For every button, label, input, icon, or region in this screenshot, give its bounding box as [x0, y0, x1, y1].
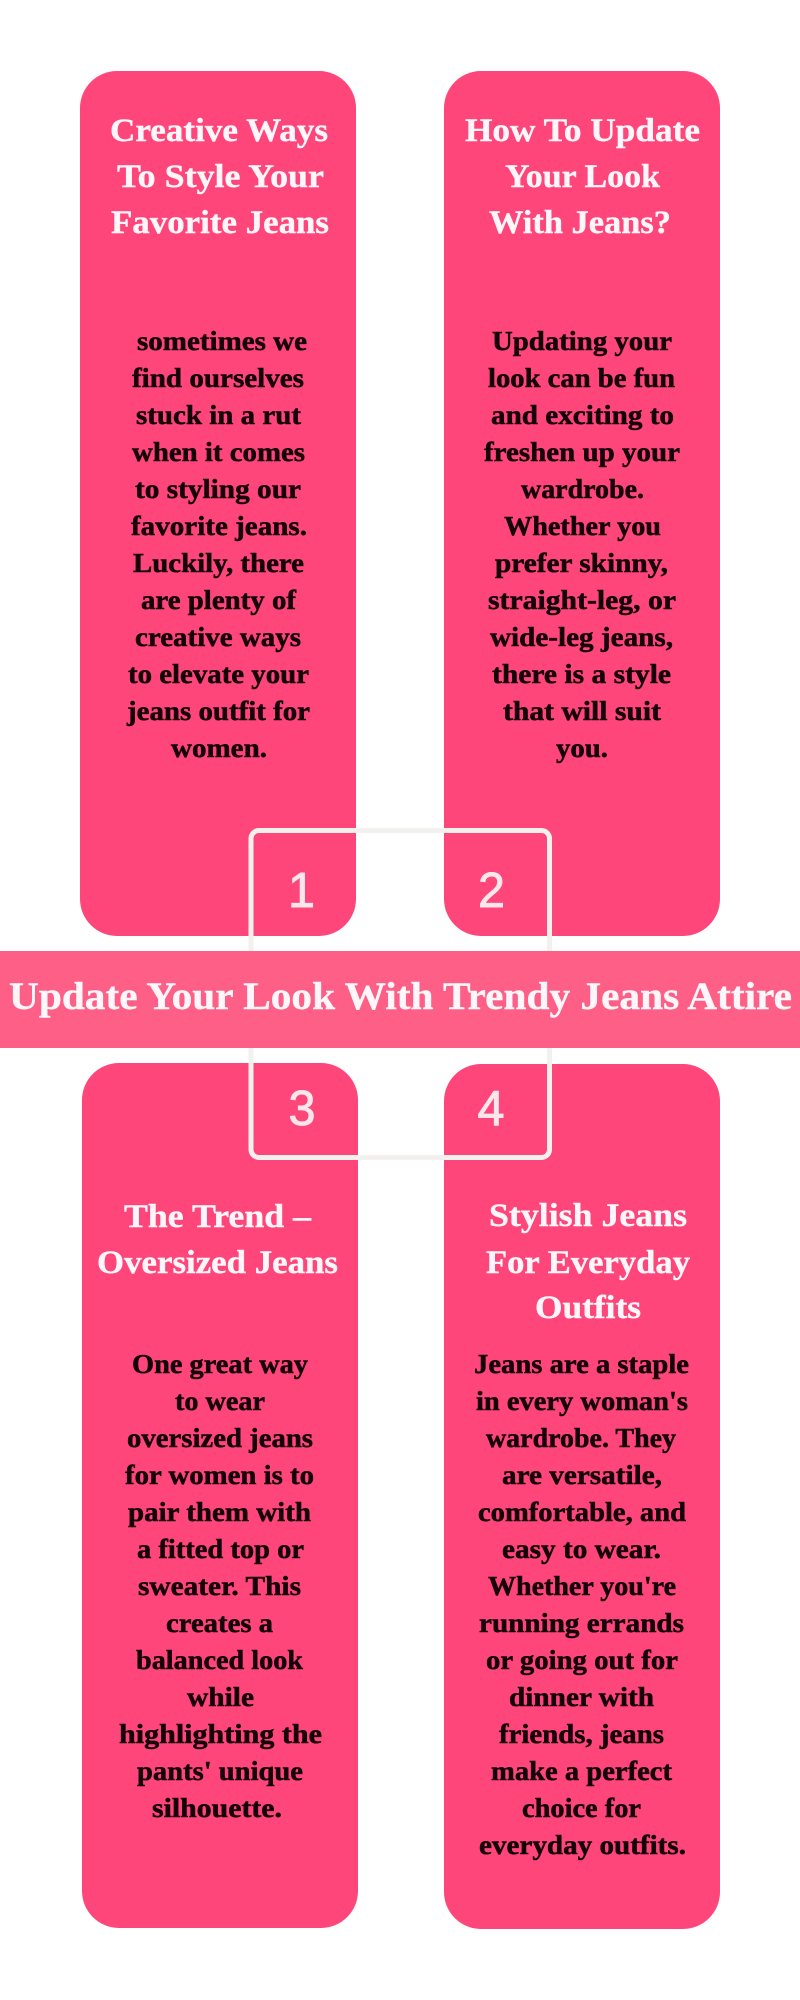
text block: how to update body: there is a style [492, 658, 671, 689]
text block: stylish jeans body: friends, jeans [499, 1718, 664, 1749]
text block: how to update body: and exciting to [491, 399, 674, 430]
text block: creative ways body: are plenty of [141, 584, 297, 615]
text block: stylish jeans body: make a perfect [491, 1755, 673, 1786]
number 3: 3 [288, 1082, 316, 1136]
text block: how to update body: Updating your [492, 325, 672, 356]
text block: how to update body: straight-leg, or [488, 584, 676, 615]
heading: how to update [465, 113, 700, 241]
text block: creative ways body: stuck in a rut [136, 399, 302, 430]
text block: stylish jeans body: choice for [522, 1792, 641, 1823]
heading: stylish jeans [486, 1198, 691, 1326]
heading: creative ways: To Style Your [117, 159, 324, 195]
title: Update Your Look With Trendy Jeans Attire [9, 975, 792, 1018]
text block: the trend body: oversized jeans [127, 1422, 313, 1453]
text block: the trend body: creates a [166, 1607, 273, 1638]
heading: how to update: How To Update [465, 113, 700, 149]
text block: stylish jeans body: Whether you're [488, 1570, 676, 1601]
text block: creative ways body: favorite jeans. [131, 510, 307, 541]
number 4: 4 [478, 1082, 504, 1136]
text block: creative ways body [126, 325, 310, 763]
text block: how to update body: prefer skinny, [495, 547, 668, 578]
text block: stylish jeans body: Jeans are a staple [474, 1348, 689, 1379]
text block: creative ways body: to styling our [135, 473, 301, 504]
text block: creative ways body: sometimes we [137, 325, 307, 356]
heading: stylish jeans: Outfits [535, 1290, 641, 1326]
heading: the trend: Oversized Jeans [97, 1245, 338, 1281]
text block: the trend body: One great way [132, 1348, 308, 1379]
text block: creative ways body: women. [171, 732, 267, 763]
text block: stylish jeans body: dinner with [509, 1681, 654, 1712]
text block: the trend body: silhouette. [152, 1792, 282, 1823]
text block: stylish jeans body: everyday outfits. [479, 1829, 686, 1860]
text block: the trend body: sweater. This [138, 1570, 301, 1601]
text block: how to update body: wardrobe. [521, 473, 644, 504]
text block: the trend body [119, 1348, 322, 1823]
number 1: 1 [288, 864, 315, 918]
heading: stylish jeans: Stylish Jeans [489, 1198, 687, 1234]
text block: creative ways body: jeans outfit for [126, 695, 310, 726]
heading: how to update: Your Look [505, 159, 661, 195]
text block: stylish jeans body: or going out for [486, 1644, 678, 1675]
heading: stylish jeans: For Everyday [486, 1245, 691, 1281]
heading: the trend: The Trend – [124, 1199, 312, 1235]
text block: stylish jeans body: running errands [479, 1607, 684, 1638]
text block: stylish jeans body: easy to wear. [502, 1533, 661, 1564]
text block: stylish jeans body: in every woman's [476, 1385, 688, 1416]
text block: the trend body: to wear [175, 1385, 265, 1416]
text block: the trend body: pair them with [128, 1496, 311, 1527]
text block: how to update body: wide-leg jeans, [490, 621, 673, 652]
text block: stylish jeans body [474, 1348, 689, 1860]
text block: stylish jeans body: wardrobe. They [486, 1422, 676, 1453]
text block: the trend body: balanced look [136, 1644, 304, 1675]
panel: the trend oversized jeans [82, 1063, 358, 1928]
text block: creative ways body: Luckily, there [133, 547, 304, 578]
text block: the trend body: pants' unique [137, 1755, 303, 1786]
heading: creative ways [110, 113, 329, 241]
text block: how to update body [484, 325, 680, 763]
number 2: 2 [478, 864, 505, 918]
number frame [251, 830, 550, 1158]
heading: creative ways: Creative Ways [110, 113, 328, 149]
text block: creative ways body: to elevate your [128, 658, 309, 689]
heading: creative ways: Favorite Jeans [111, 205, 329, 241]
panel: creative ways to style your favorite jeans [80, 71, 356, 936]
text block: the trend body: a fitted top or [137, 1533, 304, 1564]
text block: how to update body: look can be fun [488, 362, 675, 393]
text block: how to update body: that will suit [503, 695, 662, 726]
text block: stylish jeans body: comfortable, and [478, 1496, 686, 1527]
text block: how to update body: Whether you [504, 510, 661, 541]
text block: creative ways body: creative ways [135, 621, 301, 652]
text block: how to update body: freshen up your [484, 436, 680, 467]
text block: the trend body: while [187, 1681, 254, 1712]
title band [0, 951, 800, 1048]
text block: stylish jeans body: are versatile, [502, 1459, 662, 1490]
heading: the trend [97, 1199, 338, 1281]
text block: how to update body: you. [556, 732, 608, 763]
text block: creative ways body: when it comes [132, 436, 305, 467]
text block: the trend body: for women is to [125, 1459, 314, 1490]
text block: creative ways body: find ourselves [132, 362, 304, 393]
panel: stylish jeans for everyday outfits [444, 1064, 720, 1929]
panel: how to update your look [444, 71, 720, 936]
heading: how to update: With Jeans? [489, 205, 671, 241]
text block: the trend body: highlighting the [119, 1718, 322, 1749]
